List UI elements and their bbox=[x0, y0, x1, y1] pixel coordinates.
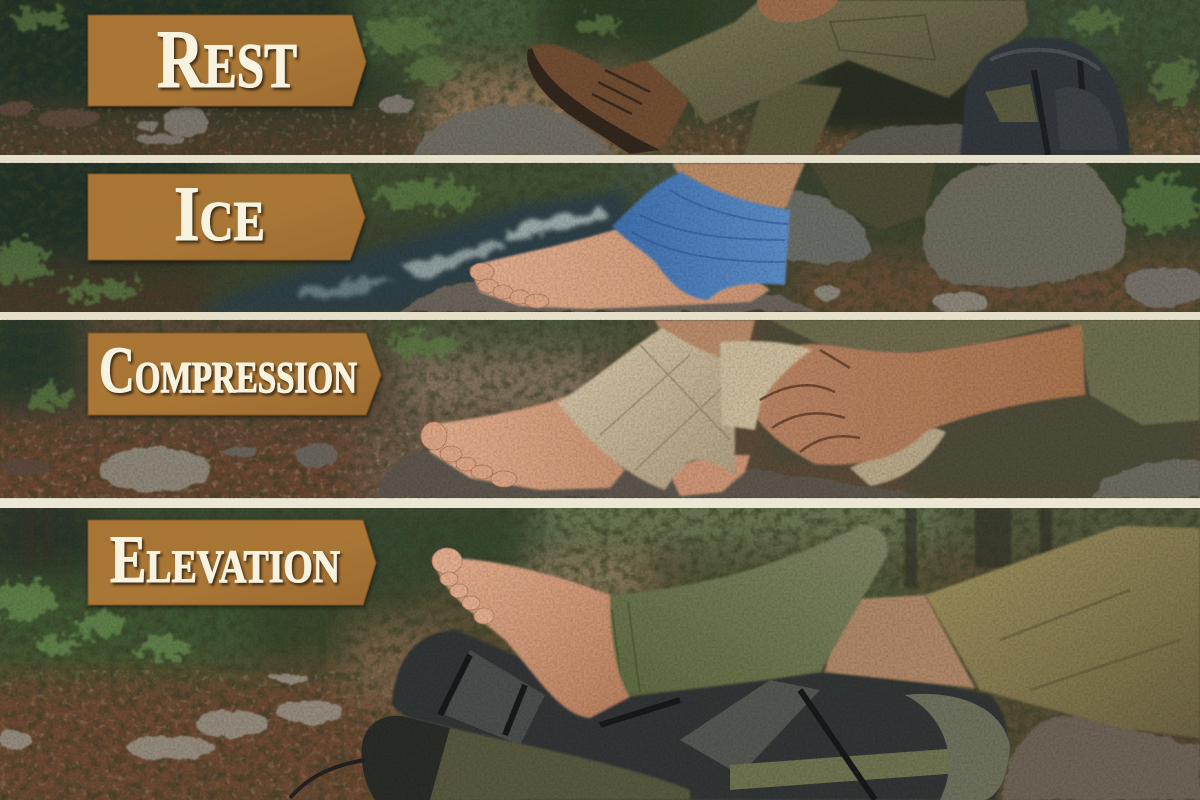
boulder right bbox=[922, 163, 1126, 287]
trouser behind bbox=[810, 163, 935, 230]
rock lower right bbox=[1002, 716, 1200, 800]
panel: rest bbox=[0, 0, 1200, 155]
fingers bbox=[760, 350, 860, 452]
stream bbox=[195, 190, 628, 312]
far leg bbox=[745, 80, 842, 155]
rolled mat bbox=[362, 716, 690, 800]
right rock bbox=[1090, 460, 1200, 498]
hand bbox=[757, 0, 838, 22]
backpack bbox=[960, 38, 1130, 155]
ankle bbox=[655, 320, 755, 362]
thigh trousers bbox=[646, 0, 1028, 124]
thigh shorts bbox=[925, 526, 1200, 738]
forearm and hand bbox=[752, 325, 1085, 465]
small rocks bbox=[0, 97, 416, 146]
toes bbox=[432, 548, 494, 624]
small stones bbox=[815, 267, 1200, 311]
bare foot bbox=[470, 228, 770, 309]
divider 2 bbox=[0, 312, 1200, 319]
panel: compression bbox=[0, 320, 1200, 498]
ground speckle bbox=[0, 108, 1200, 155]
panel: elevation bbox=[0, 490, 1200, 800]
ground speckle bbox=[0, 670, 400, 800]
foliage bbox=[14, 10, 1199, 100]
label: compression: COMPRESSION bbox=[99, 334, 357, 407]
ground rocks bbox=[0, 443, 339, 493]
divider 1 bbox=[0, 155, 1200, 162]
label: rest: REST bbox=[157, 13, 297, 105]
ground speckle bbox=[0, 420, 420, 498]
ground rocks bbox=[0, 673, 343, 760]
toes bbox=[470, 263, 549, 308]
bare lower leg bbox=[825, 595, 975, 688]
sign: rest bbox=[88, 13, 366, 106]
sign: ice bbox=[88, 170, 365, 260]
heel bbox=[668, 455, 750, 496]
background mottle bbox=[0, 163, 1200, 312]
tree trunks bbox=[20, 508, 1052, 586]
fern foliage bbox=[0, 177, 1198, 300]
bandage lower tail bbox=[850, 426, 946, 486]
elastic bandage bbox=[558, 328, 735, 490]
background mottle bbox=[0, 320, 650, 498]
background mottle bbox=[0, 0, 1200, 155]
rock under boot bbox=[414, 104, 612, 155]
bandage roll tail bbox=[720, 341, 812, 430]
divider 3 bbox=[0, 499, 1200, 508]
sock bbox=[607, 525, 888, 697]
rock under foot bbox=[376, 451, 940, 498]
fern foliage bbox=[0, 580, 193, 657]
sign: compression bbox=[88, 333, 381, 415]
background mottle bbox=[0, 508, 1200, 800]
blue ice wrap bbox=[612, 172, 790, 300]
boot bbox=[530, 44, 690, 154]
panel: ice bbox=[0, 163, 1200, 312]
lower leg bbox=[672, 163, 805, 210]
rear rock bbox=[835, 125, 965, 155]
toes bbox=[421, 422, 517, 487]
rock behind ankle bbox=[785, 192, 872, 263]
shirt and trousers bbox=[760, 320, 1200, 498]
label: elevation: ELEVATION bbox=[110, 521, 340, 597]
rolled sleeve bbox=[1068, 320, 1200, 425]
label: ice: ICE bbox=[174, 170, 265, 257]
shadow behind legs bbox=[820, 55, 990, 130]
sign: elevation bbox=[88, 520, 376, 605]
rock under foot bbox=[400, 282, 815, 312]
bare foot bbox=[425, 395, 625, 490]
backpack bbox=[392, 630, 1008, 800]
bare foot bbox=[434, 558, 630, 718]
leaves bbox=[28, 334, 463, 410]
upper shirt fabric bbox=[772, 320, 1070, 353]
